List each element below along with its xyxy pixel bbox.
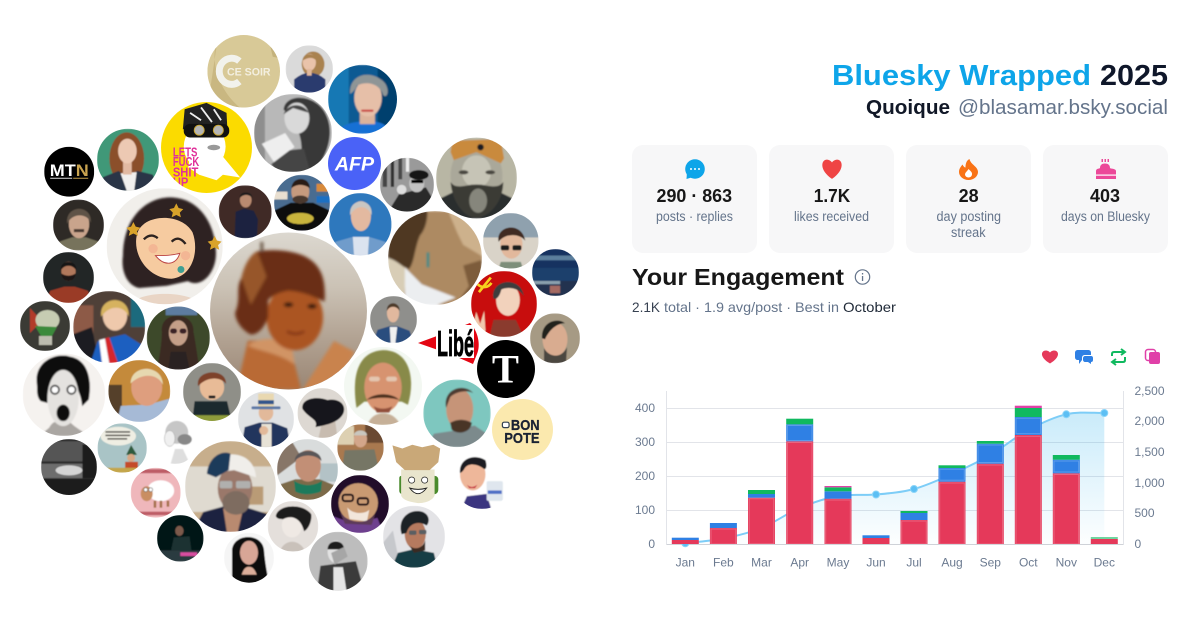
month labels: Sep bbox=[980, 556, 1001, 570]
bar: Oct bbox=[1015, 406, 1042, 544]
left axis labels: 0 bbox=[648, 537, 655, 551]
avatar: Libé logo: Libé bbox=[437, 323, 474, 364]
avatar: Uncle Sam bbox=[238, 391, 294, 447]
cumulative line points bbox=[682, 410, 1108, 547]
bar: Jan bbox=[672, 538, 699, 544]
stat card: days on Bluesky: 403 bbox=[1090, 186, 1120, 206]
engagement summary line: 2.1K bbox=[632, 299, 661, 315]
stat card: days on Bluesky bbox=[1043, 145, 1168, 253]
engagement summary line bbox=[632, 299, 896, 315]
avatar: MTN logo: N bbox=[76, 161, 89, 180]
stat card: posts and replies: 290 · 863 bbox=[657, 186, 732, 206]
avatar: Bon Pote logo: BON bbox=[511, 418, 540, 434]
stat card: likes received: likes received bbox=[794, 209, 869, 224]
subtitle: name and handle: @blasamar.bsky.social bbox=[958, 97, 1168, 119]
right axis labels: 2,000 bbox=[1134, 414, 1165, 428]
avatar: bearded man with crown bbox=[436, 138, 517, 218]
avatar: man on teal background bbox=[423, 380, 491, 447]
month labels: Feb bbox=[713, 556, 734, 570]
avatar: man in cap and glasses selfie bbox=[185, 441, 276, 532]
avatar: anime boy on red with hammer and sickle bbox=[471, 271, 537, 337]
bar: Nov bbox=[1053, 455, 1080, 544]
icon: birthday cake bbox=[1096, 159, 1116, 179]
left axis labels: 100 bbox=[635, 503, 655, 517]
avatar: man with dark hair, serious bbox=[530, 313, 580, 363]
avatar: Bon Pote logo bbox=[492, 399, 553, 460]
avatar: engraving of a woman in profile bbox=[164, 420, 192, 464]
avatar: black and white woman reading bbox=[254, 94, 332, 172]
avatar: woman neck and earring close up bbox=[388, 211, 482, 305]
bar: Jul bbox=[900, 511, 928, 544]
right axis labels: 0 bbox=[1134, 537, 1142, 551]
avatar: sketched woman with dark hair bbox=[268, 501, 318, 552]
avatar: New York Times T logo: T bbox=[492, 346, 519, 391]
title: 2025 bbox=[1100, 60, 1168, 92]
icon: heart bbox=[822, 160, 842, 179]
stat card: day posting streak bbox=[906, 145, 1031, 253]
stat card: days on Bluesky: days on Bluesky bbox=[1061, 209, 1150, 224]
month labels: Jun bbox=[866, 556, 886, 570]
bar: Feb bbox=[710, 523, 737, 544]
legend icon: likes heart bbox=[1042, 350, 1058, 364]
avatar: man in glasses with dark curly hair bbox=[383, 506, 445, 568]
avatar: man in black t-shirt in front of screens bbox=[274, 175, 330, 231]
month labels: Jan bbox=[676, 556, 695, 570]
avatar: boy with curly hair at the sea, largest bubble bbox=[210, 232, 367, 390]
avatar: older man at a workshop bbox=[337, 424, 384, 471]
cumulative area bbox=[685, 413, 1104, 544]
avatar: grey haired woman bbox=[328, 65, 398, 134]
stat card: day posting streak: day posting bbox=[937, 209, 1001, 224]
avatar: woman with round sunglasses bbox=[147, 306, 210, 370]
avatar: sea landscape bbox=[532, 249, 579, 296]
legend icon: quotes squares bbox=[1146, 350, 1160, 364]
month labels: May bbox=[827, 556, 849, 570]
avatar: Bon Pote logo: POTE bbox=[504, 431, 540, 447]
stat card: posts and replies: posts · replies bbox=[656, 209, 733, 224]
avatar: man with red shirt and beard bbox=[43, 252, 94, 303]
left axis labels: 400 bbox=[635, 401, 655, 415]
month labels: Dec bbox=[1094, 556, 1115, 570]
bar: Jun bbox=[862, 535, 890, 544]
bar: Mar bbox=[748, 490, 775, 544]
avatar bubble cluster bbox=[20, 35, 580, 591]
stat card: day posting streak: 28 bbox=[959, 186, 979, 206]
avatar: yellow LETS FUCK SHIT UP cartoon: LETS bbox=[173, 145, 197, 160]
right axis labels bbox=[1134, 384, 1165, 551]
subtitle: name and handle bbox=[866, 97, 1168, 119]
avatar: cartoon man in brown cap bbox=[183, 363, 241, 422]
avatar: smiling blond man bbox=[108, 360, 170, 422]
bar: Sep bbox=[977, 441, 1004, 544]
avatar: anime girl bbox=[107, 188, 223, 304]
month labels: Aug bbox=[941, 556, 963, 570]
avatar: woman from behind with hair bun bbox=[298, 388, 348, 438]
avatar: AFP logo: AFP bbox=[334, 154, 374, 175]
chart legend bbox=[1042, 349, 1160, 365]
bar: May bbox=[824, 486, 852, 544]
avatar: CE SOIR logo bbox=[207, 35, 280, 108]
cumulative line bbox=[685, 413, 1104, 543]
right axis labels: 500 bbox=[1134, 506, 1155, 520]
right axis labels: 1,000 bbox=[1134, 476, 1165, 490]
left axis labels: 200 bbox=[635, 469, 655, 483]
left axis labels: 300 bbox=[635, 435, 655, 449]
avatar: MTN logo: MT bbox=[50, 161, 76, 180]
avatar: man in dark sweater bbox=[219, 185, 272, 238]
avatar: yellow LETS FUCK SHIT UP cartoon: SHIT bbox=[173, 165, 198, 180]
left axis labels bbox=[635, 401, 655, 551]
avatar: young man in blue suit on grey bbox=[370, 296, 417, 343]
bar: Aug bbox=[938, 465, 966, 544]
avatar: black and white man in sunglasses bbox=[380, 158, 434, 212]
avatar: blonde woman with tricolour sash bbox=[73, 291, 145, 363]
right axis labels: 1,500 bbox=[1134, 445, 1165, 459]
avatar: man with moustache and long hair bbox=[344, 347, 422, 425]
avatar: smiling leek cartoon bbox=[392, 445, 440, 503]
avatar: raised fist bbox=[20, 301, 70, 351]
month labels: Apr bbox=[790, 556, 809, 570]
avatar: screaming woman bbox=[23, 353, 105, 436]
icon: chat bubble bbox=[685, 159, 705, 179]
avatar: black and white lake bbox=[41, 439, 97, 496]
avatar: young man in sunglasses bbox=[483, 213, 539, 269]
engagement summary line: October bbox=[843, 299, 896, 315]
avatar: woman on green background bbox=[97, 129, 159, 191]
avatar: yellow LETS FUCK SHIT UP cartoon: FUCK bbox=[173, 154, 200, 169]
avatar: New York Times T logo bbox=[477, 340, 535, 398]
title: Bluesky Wrapped bbox=[832, 60, 1091, 92]
avatar: black and white man covering his face bbox=[309, 532, 368, 591]
stat card: likes received: 1.7K bbox=[814, 186, 850, 206]
avatar: AFP logo bbox=[328, 137, 381, 190]
engagement chart bbox=[635, 384, 1165, 570]
icon: flame bbox=[959, 159, 978, 180]
engagement summary line: total · 1.9 avg/post · Best in bbox=[664, 299, 839, 315]
month labels: Oct bbox=[1019, 556, 1038, 570]
avatar: woman in blue top bbox=[286, 45, 333, 93]
avatar: yellow LETS FUCK SHIT UP cartoon: UP bbox=[173, 175, 189, 190]
avatar: bearded man with glasses on purple bbox=[331, 475, 389, 533]
month labels: Nov bbox=[1056, 556, 1077, 570]
avatar: CE SOIR logo: CE SOIR bbox=[227, 66, 271, 78]
month labels bbox=[676, 556, 1115, 570]
icon: info bbox=[855, 270, 870, 284]
avatar: MTN logo bbox=[44, 147, 94, 197]
month labels: Jul bbox=[906, 556, 922, 570]
legend icon: reposts arrows bbox=[1112, 349, 1125, 365]
subtitle: name and handle: Quoique bbox=[866, 97, 950, 119]
stat card: posts and replies bbox=[632, 145, 757, 253]
stat card: likes received bbox=[769, 145, 894, 253]
heading: Your Engagement: Your Engagement bbox=[632, 264, 844, 290]
avatar: pink sheep bbox=[131, 468, 181, 518]
avatar: man with green scarf bbox=[277, 439, 338, 500]
month labels: Mar bbox=[751, 556, 772, 570]
legend icon: replies bubbles bbox=[1075, 350, 1093, 364]
avatar: dark haired woman in black bbox=[224, 533, 274, 584]
avatar: stubbled man bbox=[53, 200, 104, 250]
avatar: yellow LETS FUCK SHIT UP cartoon bbox=[161, 102, 252, 193]
bar: Apr bbox=[786, 419, 813, 544]
avatar: comic strip panel bbox=[97, 423, 147, 473]
avatar: man in blue suit bbox=[329, 193, 392, 256]
avatar: Libé logo bbox=[418, 323, 479, 364]
right axis labels: 2,500 bbox=[1134, 384, 1165, 398]
bar: Dec bbox=[1091, 537, 1118, 544]
stat card: day posting streak: streak bbox=[951, 225, 986, 240]
avatar: DJ in dark room bbox=[157, 515, 204, 562]
avatar: caricature man with mug bbox=[453, 451, 511, 509]
